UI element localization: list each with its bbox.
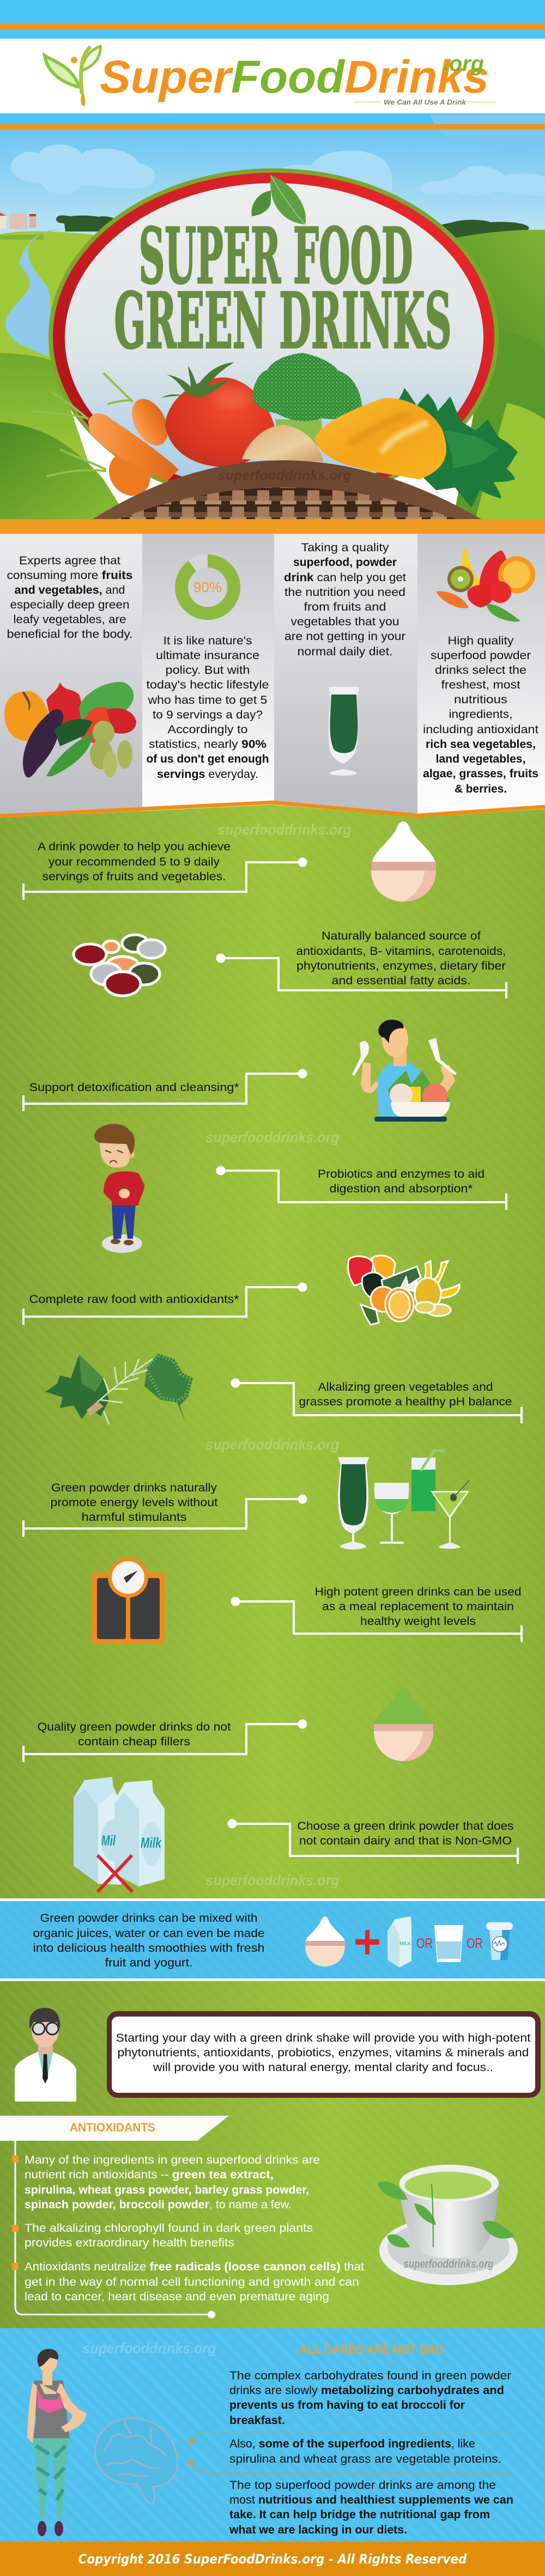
column 2 text: policy. But with [166,663,250,677]
column 2 text: who has time to get 5 [147,693,268,707]
column 3 text: drink can help you get [284,571,406,584]
benefit 9 [23,1688,433,1762]
text: High potent green drinks can be used [315,1585,521,1598]
houses [0,212,36,229]
hero scene [0,114,545,523]
benefit 10 [74,1777,518,1892]
orange band [0,519,545,534]
watermark: superfooddrinks.org [403,2258,494,2270]
icon: leaf sprout [45,46,100,106]
icon: man with stomach ache [94,1124,144,1253]
clouds [11,114,545,202]
benefit 4 [94,1124,506,1253]
column 2 text: servings everyday. [157,768,258,781]
connector [23,857,307,900]
text: antioxidants, B- vitamins, carotenoids, [296,945,506,958]
icon: milk carton small: MILK [399,1941,411,1946]
column 3 text [284,541,406,658]
river [5,228,66,357]
watermarks: superfooddrinks.org [206,1436,340,1453]
column 1 text: beneficial for the body. [7,628,133,641]
text: most nutritious and healthiest supplements we can [229,2493,513,2506]
column 1 text: consuming more fruits [7,569,133,582]
icon: green powder bowl [374,1688,433,1761]
distant trees left [56,215,122,232]
text: The complex carbohydrates found in green powder [229,2369,511,2382]
text: promote energy levels without [50,1496,218,1509]
column 1 text: especially deep green [10,598,130,611]
column 4 text: superfood powder [431,649,531,662]
text: Green powder drinks can be mixed with [40,1911,257,1925]
column 4 text: freshest, most [441,678,520,691]
OR label: OR [467,1936,483,1951]
panel: all carbs are not bad [0,2328,545,2542]
footer [0,2542,545,2576]
bracket line [12,2141,215,2318]
text: and essential fatty acids. [331,974,471,987]
column 4 text: & berries. [455,782,507,795]
text [298,1819,513,1847]
text: nutrient rich antioxidants -- green tea extract, [25,2168,274,2181]
benefit 8 [92,1557,522,1643]
column 4 text: rich sea vegetables, [426,738,536,751]
text: Antioxidants neutralize free radicals (loose cannon cells) that [25,2260,364,2273]
text: Quality green powder drinks do not [37,1720,231,1733]
carrot stems [33,373,133,477]
column 4 text: High quality [448,634,514,647]
column 4 text: including antioxidant [423,723,538,736]
column 2 text: of us don't get enough [146,752,269,765]
parsley [377,388,518,508]
tagline: We Can All Use A Drink [384,98,467,106]
donut chart: 90% [193,579,222,595]
header background [0,0,545,131]
panel: mixing band [0,1898,545,1981]
icon: green drink glass [329,687,359,776]
column 2 text: today's hectic lifestyle [146,678,269,691]
column backgrounds [0,534,545,815]
watermark: superfooddrinks.org [83,2340,216,2356]
text: Many of the ingredients in green superfood drinks are [25,2153,320,2166]
benefit 5 [23,1256,459,1325]
text: contain cheap fillers [78,1735,190,1748]
column 3 text: superfood, powder [293,556,397,569]
column 2 text: ultimate insurance [156,649,259,662]
logo [45,46,496,106]
column 4 text: ingredients, [449,708,512,721]
text: grasses promote a healthy pH balance [299,1395,512,1408]
connector [216,953,506,998]
icon: milk cartons crossed out: Mil [101,1832,116,1849]
benefit 6 [45,1354,522,1424]
column 2 text: statistics, nearly 90% [149,738,267,751]
title [114,212,451,366]
icon: drinks [338,1451,469,1549]
column 2 text [146,634,269,781]
icon: basil leaves [251,175,306,224]
text [299,1380,512,1408]
column 3 text: Taking a quality [301,541,389,554]
text: Alkalizing green vegetables and [318,1380,493,1393]
text [33,1911,265,1969]
text: healthy weight levels [360,1615,476,1628]
icon: vegetables cluster [4,682,136,777]
column 3 text: the nutrition you need [284,586,405,599]
text [25,2153,364,2303]
text: Probiotics and enzymes to aid [318,1167,485,1180]
connector [23,1282,307,1325]
text: breakfast. [229,2414,285,2427]
text [296,929,506,987]
column 4 text: drinks select the [435,663,526,677]
text: take. It can help bridge the nutritional gap from [229,2508,490,2521]
icon: brain [95,2419,177,2504]
watermarks: superfooddrinks.org [206,1872,340,1889]
connectors [189,2432,513,2473]
text [38,840,231,883]
text: organic juices, water or can even be made [33,1927,265,1940]
text: Complete raw food with antioxidants* [29,1293,239,1306]
column 4 text [423,634,538,795]
heading: ALL CARBS ARE NOT BAD [300,2342,444,2356]
text: Choose a green drink powder that does [298,1819,513,1832]
intro columns [0,534,545,815]
text: Naturally balanced source of [322,929,481,942]
heading banner [0,2116,229,2141]
text: as a meal replacement to maintain [322,1600,514,1613]
callout [107,2011,541,2098]
callout: will provide you with natural energy, mental clarity and focus.. [153,2061,493,2074]
hills [0,232,142,381]
column 2 text: to 9 servings a day? [153,708,263,721]
broccoli [275,419,323,458]
icon: powder bowl [371,821,436,902]
text [229,2369,513,2536]
vegetables [33,353,518,508]
watermarks: superfooddrinks.org [206,1129,340,1146]
text: The alkalizing chlorophyll found in dark green plants [25,2221,313,2234]
column 3 text: from fruits and [304,600,386,613]
callout: phytonutrients, antioxidants, probiotics, enzymes, vitamins & minerals and [118,2046,529,2059]
basket [93,460,481,519]
icon: doctor [15,2008,76,2102]
column 4 text: land vegetables, [436,752,525,765]
watermark: superfooddrinks.org [218,468,351,483]
icon: green tea cup [377,2165,518,2285]
donut chart [181,555,234,613]
column 2 text: It is like nature's [164,634,252,647]
watermarks [206,821,352,1889]
text: spirulina, wheat grass powder, barley grass powder, [25,2183,309,2196]
benefit 3 [23,1020,457,1122]
icon: plus [355,1930,379,1954]
text [50,1481,218,1524]
text: Green powder drinks naturally [51,1481,217,1494]
icon: weighing scale [92,1557,165,1643]
text: prevents us from having to eat broccoli for [229,2398,465,2411]
text: The top superfood powder drinks are among the [229,2478,496,2492]
column 3 text: are not getting in your [284,630,405,643]
sky [0,130,545,239]
text: lead to cancer, heart disease and even premature aging [25,2290,329,2303]
text [37,1720,231,1748]
icon: mixed fruit [348,1256,459,1325]
text: phytonutrients, enzymes, dietary fiber [296,959,506,972]
text: your recommended 5 to 9 daily [49,855,220,868]
text: spinach powder, broccoli powder, to name a few. [25,2198,292,2211]
text: harmful stimulants [82,1511,186,1524]
icon: fruit cluster [436,547,535,622]
column 1 text: leafy vegetables, are [13,613,126,626]
wordmark: SuperFoodDrinks [100,51,489,102]
icon: herbs [45,1354,193,1424]
icon: milk carton small [387,1916,411,1968]
column 1 text: and vegetables, and [14,583,125,596]
text: digestion and absorption* [329,1182,473,1195]
text [315,1585,521,1628]
benefit 2 [74,929,506,998]
connector [216,1166,506,1210]
distant trees right [435,220,529,245]
column 2 text: Accordingly to [168,723,248,736]
text: provides extraordinary health benefits [25,2236,234,2249]
text: get in the way of normal cell functioning and growth and can [25,2275,359,2288]
column 3 text: normal daily diet. [298,645,392,658]
connector [23,1719,307,1762]
icon: man eating salad [352,1020,457,1122]
column 3 text: vegetables that you [291,615,399,628]
watermarks: superfooddrinks.org [218,821,352,838]
text: Also, some of the superfood ingredients, like [229,2437,475,2450]
icon: woman [27,2349,86,2536]
column 1 text [7,554,133,641]
text: drinks are slowly metabolizing carbohydrates and [229,2384,504,2397]
text: spirulina and wheat grass are vegetable proteins. [229,2452,501,2465]
carrots [125,393,175,452]
icon: milk cartons crossed out: Milk [141,1835,162,1851]
oval sign [49,168,499,505]
connector [231,1597,522,1642]
text: fruit and yogurt. [105,1956,193,1969]
text: not contain dairy and that is Non-GMO [299,1834,512,1847]
panel: antioxidants [0,2116,518,2318]
icon: milk cartons crossed out [74,1777,165,1892]
benefit 7 [23,1451,469,1549]
connector [23,1069,307,1111]
text: A drink powder to help you achieve [38,840,231,853]
onion [242,425,323,461]
OR label: OR [416,1936,433,1951]
text [318,1167,485,1195]
green benefits background [0,802,545,1901]
tomato [165,377,274,467]
text: what we are lacking in our diets. [229,2523,407,2536]
footer: Copyright 2016 SuperFoodDrinks.org - All Rights Reserved [78,2551,467,2567]
icon: yogurt [486,1922,513,1960]
icon: beans [74,935,165,996]
.org: .org [443,52,484,76]
connector [23,1495,307,1537]
column 1 text: Experts agree that [19,554,120,567]
pepper [314,398,446,479]
heading banner: ANTIOXIDANTS [70,2121,155,2134]
connector [228,1819,518,1864]
column 4 text: algae, grasses, fruits [423,767,538,780]
green lower background [0,1981,545,2328]
icon: water glass [434,1925,463,1962]
icon: powder bowl small [305,1916,345,1966]
text: into delicious health smoothies with fresh [33,1941,264,1954]
text: Support detoxification and cleansing* [29,1081,239,1094]
callout: Starting your day with a green drink shake will provide you with high-potent [116,2031,531,2044]
connector [231,1378,522,1423]
benefit 1 [23,821,436,902]
text: servings of fruits and vegetables. [43,870,226,883]
column 4 text: nutritious [454,693,507,706]
